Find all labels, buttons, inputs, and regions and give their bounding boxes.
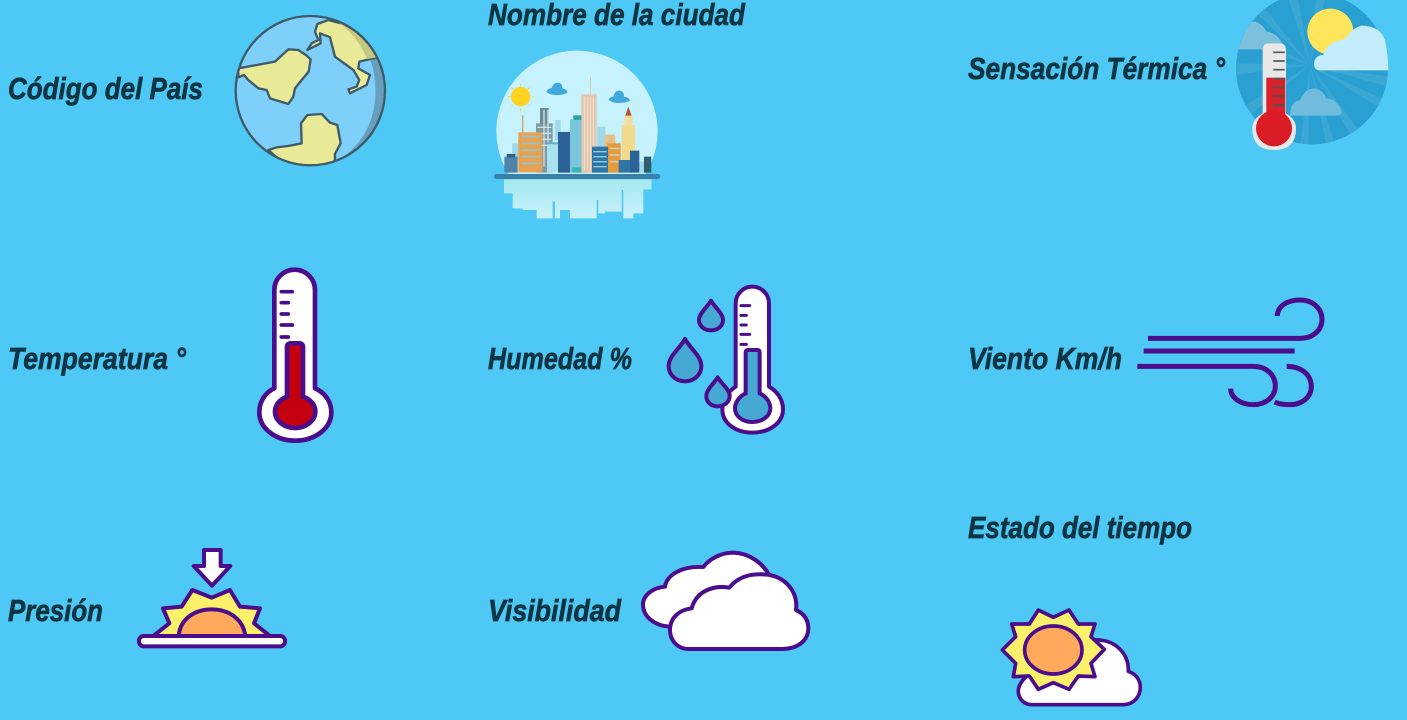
label: Humedad: Humedad % bbox=[488, 341, 632, 376]
label: Presión: Presión bbox=[8, 593, 103, 628]
label: Sensación Térmica: Sensación Térmica ° bbox=[968, 51, 1226, 86]
icon: clouds bbox=[643, 553, 808, 649]
label: Visibilidad: Visibilidad bbox=[488, 593, 622, 628]
icon: wind bbox=[1137, 300, 1322, 405]
icon: sun, clouds and thermometer bbox=[1233, 0, 1388, 150]
icon: sun behind cloud bbox=[1002, 610, 1140, 705]
icon: humidity thermometer with drops bbox=[669, 287, 783, 433]
icon: pressure sun with arrow bbox=[139, 550, 285, 646]
icon: city skyline bbox=[494, 51, 660, 218]
label: Estado del tiempo: Estado del tiempo bbox=[968, 510, 1192, 545]
icon: globe bbox=[236, 16, 390, 170]
label: Temperatura: Temperatura ° bbox=[8, 341, 187, 376]
label: Viento: Viento Km/h bbox=[968, 341, 1122, 376]
label: Código del País: Código del País bbox=[8, 71, 203, 106]
icon: red thermometer bbox=[259, 270, 331, 441]
